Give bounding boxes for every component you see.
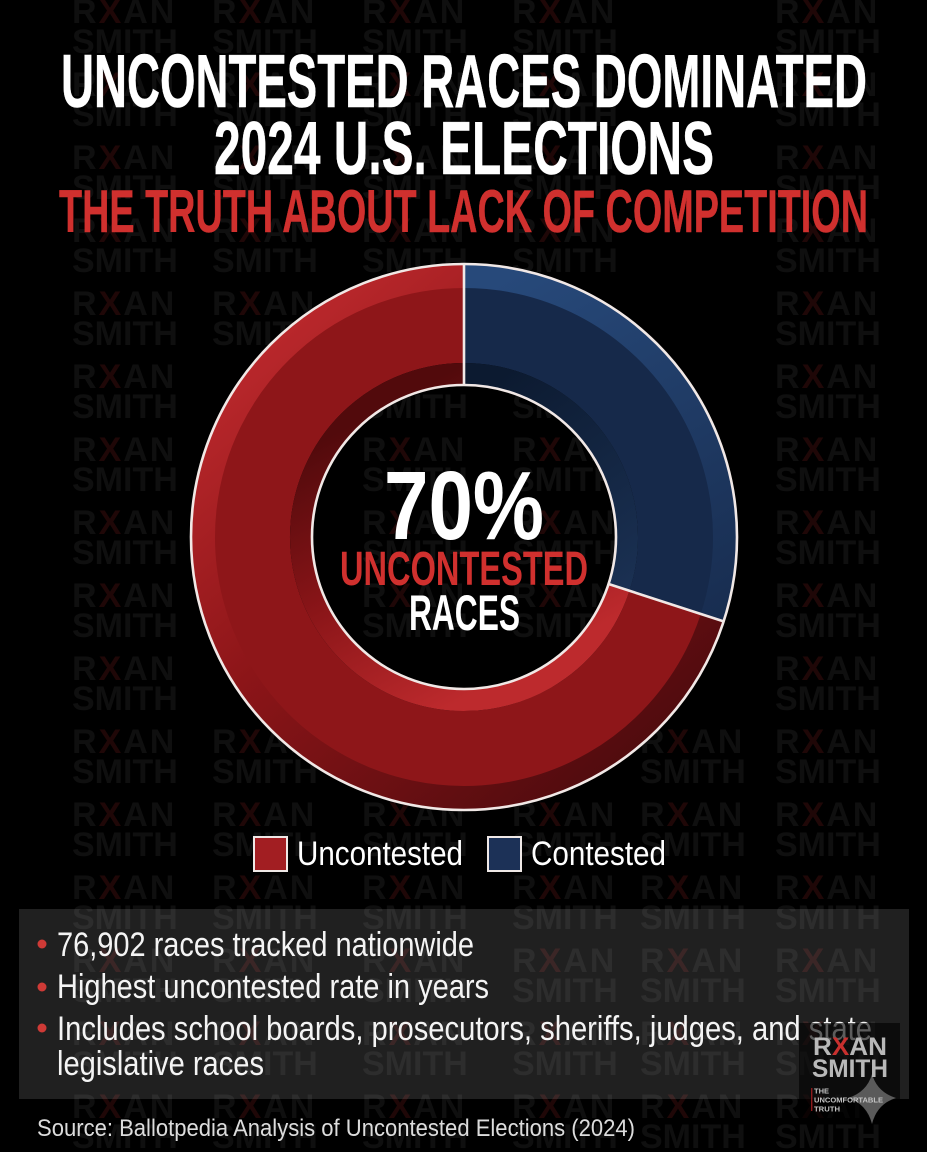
- bullet 2: Highest uncontested rate in years: [57, 968, 489, 1006]
- watermark pattern: SMITH: [212, 23, 318, 61]
- watermark pattern: RXAN: [512, 796, 616, 834]
- legend: [254, 835, 666, 873]
- watermark pattern: RXAN: [72, 650, 176, 688]
- watermark pattern: SMITH: [72, 169, 178, 207]
- watermark pattern: RXAN: [775, 358, 879, 396]
- watermark pattern: RXAN: [362, 212, 466, 250]
- watermark pattern: SMITH: [72, 388, 178, 426]
- watermark pattern: RXAN: [775, 1015, 879, 1053]
- watermark pattern: RXAN: [212, 723, 316, 761]
- watermark pattern: SMITH: [775, 242, 881, 280]
- watermark pattern: SMITH: [72, 23, 178, 61]
- donut chart: [191, 264, 737, 810]
- watermark pattern: SMITH: [512, 23, 618, 61]
- uncontested label: UNCONTESTED: [340, 543, 588, 596]
- watermark pattern: RXAN: [640, 1015, 744, 1053]
- legend label: contested: Contested: [531, 835, 666, 873]
- watermark pattern: SMITH: [72, 96, 178, 134]
- bullet 3: [38, 1010, 872, 1083]
- watermark pattern: SMITH: [775, 315, 881, 353]
- watermark pattern: RXAN: [72, 212, 176, 250]
- watermark pattern: RXAN: [362, 796, 466, 834]
- watermark pattern: RXAN: [72, 1088, 176, 1126]
- logo name: RXAN: [813, 1033, 887, 1061]
- bullet 3: legislative races: [57, 1045, 264, 1083]
- watermark pattern: SMITH: [512, 461, 618, 499]
- watermark pattern: SMITH: [512, 534, 618, 572]
- watermark pattern: RXAN: [72, 504, 176, 542]
- watermark pattern: SMITH: [212, 826, 318, 864]
- watermark pattern: SMITH: [72, 242, 178, 280]
- watermark pattern: RXAN: [775, 942, 879, 980]
- watermark pattern: RXAN: [512, 1088, 616, 1126]
- logo backdrop: [799, 1023, 900, 1123]
- watermark pattern: SMITH: [362, 461, 468, 499]
- watermark pattern: SMITH: [362, 607, 468, 645]
- watermark pattern: RXAN: [775, 431, 879, 469]
- watermark pattern: SMITH: [775, 607, 881, 645]
- watermark pattern: SMITH: [775, 899, 881, 937]
- bullet 1: 76,902 races tracked nationwide: [57, 926, 474, 964]
- watermark pattern: RXAN: [212, 796, 316, 834]
- logo tagline: [814, 1088, 883, 1114]
- watermark pattern: SMITH: [212, 753, 318, 791]
- legend label: uncontested: Uncontested: [297, 835, 463, 873]
- panel background: [19, 909, 909, 1099]
- watermark pattern: RXAN: [72, 942, 176, 980]
- watermark pattern: RXAN: [212, 1088, 316, 1126]
- watermark pattern: RXAN: [512, 869, 616, 907]
- watermark pattern: SMITH: [640, 899, 746, 937]
- watermark pattern: SMITH: [362, 826, 468, 864]
- watermark pattern: SMITH: [362, 96, 468, 134]
- logo tagline: THE: [814, 1088, 829, 1096]
- watermark pattern: RXAN: [512, 66, 616, 104]
- watermark pattern: SMITH: [362, 972, 468, 1010]
- watermark pattern: RXAN: [512, 139, 616, 177]
- watermark pattern: RXAN: [362, 577, 466, 615]
- segment: uncontested 70%: [203, 276, 712, 798]
- watermark pattern: SMITH: [72, 899, 178, 937]
- watermark pattern: SMITH: [512, 242, 618, 280]
- watermark pattern: RXAN: [775, 869, 879, 907]
- watermark pattern: SMITH: [212, 972, 318, 1010]
- watermark pattern: SMITH: [212, 1045, 318, 1083]
- watermark pattern: SMITH: [512, 1045, 618, 1083]
- watermark pattern: RXAN: [775, 212, 879, 250]
- watermark pattern: SMITH: [72, 1045, 178, 1083]
- watermark pattern: SMITH: [362, 242, 468, 280]
- watermark pattern: SMITH: [512, 169, 618, 207]
- watermark pattern: RXAN: [775, 650, 879, 688]
- watermark pattern: RXAN: [72, 285, 176, 323]
- logo tagline: TRUTH: [814, 1106, 840, 1114]
- 70 percent: 70%: [384, 451, 544, 560]
- logo: Ryan Smith watermark badge: SMITH: [812, 1055, 888, 1083]
- watermark pattern: RXAN: [212, 942, 316, 980]
- watermark pattern: SMITH: [775, 23, 881, 61]
- watermark pattern: SMITH: [212, 169, 318, 207]
- watermark pattern: SMITH: [512, 826, 618, 864]
- watermark pattern: RXAN: [72, 796, 176, 834]
- watermark pattern: SMITH: [775, 972, 881, 1010]
- watermark pattern: RXAN: [775, 504, 879, 542]
- source note: Source: Ballotpedia Analysis of Uncontested Elections (2024): [37, 1115, 635, 1142]
- watermark pattern: RXAN: [640, 942, 744, 980]
- watermark pattern: RXAN: [362, 431, 466, 469]
- watermark pattern: SMITH: [362, 899, 468, 937]
- center label: [340, 451, 588, 641]
- watermark pattern: RXAN: [362, 139, 466, 177]
- watermark pattern: RXAN: [512, 431, 616, 469]
- watermark pattern: SMITH: [640, 826, 746, 864]
- watermark pattern: SMITH: [212, 899, 318, 937]
- watermark pattern: RXAN: [362, 66, 466, 104]
- legend swatch: uncontested: [254, 837, 287, 871]
- watermark pattern: SMITH: [212, 315, 318, 353]
- watermark pattern: SMITH: [512, 899, 618, 937]
- watermark pattern: SMITH: [775, 96, 881, 134]
- legend swatch: contested: [488, 837, 521, 871]
- watermark pattern: RXAN: [775, 796, 879, 834]
- watermark pattern: SMITH: [775, 826, 881, 864]
- watermark pattern: RXAN: [512, 1015, 616, 1053]
- watermark pattern: SMITH: [72, 972, 178, 1010]
- watermark pattern: RXAN: [775, 577, 879, 615]
- watermark pattern: SMITH: [72, 534, 178, 572]
- watermark pattern: SMITH: [775, 169, 881, 207]
- watermark pattern: SMITH: [72, 680, 178, 718]
- watermark pattern: SMITH: [512, 96, 618, 134]
- watermark pattern: RXAN: [640, 796, 744, 834]
- watermark pattern: SMITH: [362, 388, 468, 426]
- watermark pattern: SMITH: [775, 1045, 881, 1083]
- watermark pattern: RXAN: [212, 1015, 316, 1053]
- watermark pattern: SMITH: [362, 169, 468, 207]
- watermark pattern: RXAN: [775, 139, 879, 177]
- watermark pattern: SMITH: [512, 972, 618, 1010]
- watermark pattern: RXAN: [512, 212, 616, 250]
- watermark pattern: RXAN: [72, 139, 176, 177]
- watermark pattern: RXAN: [212, 66, 316, 104]
- watermark pattern: RXAN: [362, 1015, 466, 1053]
- watermark pattern: RXAN: [72, 66, 176, 104]
- watermark pattern: RXAN: [775, 723, 879, 761]
- watermark pattern: SMITH: [775, 534, 881, 572]
- watermark pattern: RXAN: [72, 358, 176, 396]
- watermark pattern: RXAN: [362, 869, 466, 907]
- watermark pattern: RXAN: [72, 431, 176, 469]
- watermark pattern: SMITH: [775, 388, 881, 426]
- watermark pattern: SMITH: [640, 1045, 746, 1083]
- logo: Ryan Smith watermark badge: [799, 1023, 900, 1124]
- watermark pattern: RXAN: [362, 504, 466, 542]
- watermark pattern: SMITH: [362, 1045, 468, 1083]
- watermark pattern: RXAN: [362, 942, 466, 980]
- watermark pattern: SMITH: [72, 461, 178, 499]
- watermark pattern: SMITH: [72, 753, 178, 791]
- watermark pattern: RXAN: [72, 723, 176, 761]
- watermark pattern: RXAN: [512, 504, 616, 542]
- watermark pattern: RXAN: [72, 1015, 176, 1053]
- watermark pattern: RXAN: [640, 1088, 744, 1126]
- watermark pattern: SMITH: [72, 826, 178, 864]
- watermark pattern: RXAN: [775, 285, 879, 323]
- watermark pattern: RXAN: [512, 577, 616, 615]
- watermark pattern: RXAN: [640, 869, 744, 907]
- watermark pattern: SMITH: [775, 753, 881, 791]
- watermark pattern: SMITH: [212, 96, 318, 134]
- watermark pattern: RXAN: [72, 869, 176, 907]
- watermark pattern: RXAN: [212, 139, 316, 177]
- watermark pattern: SMITH: [362, 534, 468, 572]
- logo star: [848, 1074, 896, 1124]
- watermark pattern: RXAN: [72, 577, 176, 615]
- watermark pattern: SMITH: [362, 23, 468, 61]
- watermark pattern: RXAN: [212, 285, 316, 323]
- watermark pattern: SMITH: [512, 388, 618, 426]
- watermark pattern: RXAN: [640, 723, 744, 761]
- watermark pattern: SMITH: [512, 607, 618, 645]
- logo tagline: UNCOMFORTABLE: [814, 1098, 883, 1104]
- watermark pattern: SMITH: [775, 680, 881, 718]
- title: [59, 39, 868, 245]
- segment: contested 30%: [464, 276, 725, 618]
- watermark pattern: RXAN: [212, 212, 316, 250]
- logo tagline rule: [811, 1088, 812, 1111]
- watermark pattern: SMITH: [640, 972, 746, 1010]
- watermark pattern: RXAN: [512, 942, 616, 980]
- white ring outlines: [191, 264, 737, 810]
- watermark pattern: RXAN: [362, 1088, 466, 1126]
- watermark pattern: SMITH: [212, 242, 318, 280]
- watermark pattern: SMITH: [72, 607, 178, 645]
- watermark pattern: RXAN: [775, 66, 879, 104]
- watermark pattern: RXAN: [775, 1088, 879, 1126]
- watermark pattern: SMITH: [72, 315, 178, 353]
- watermark pattern: SMITH: [775, 461, 881, 499]
- panel: key facts: [19, 909, 909, 1099]
- watermark pattern: RXAN: [212, 869, 316, 907]
- watermark pattern: SMITH: [640, 753, 746, 791]
- races label: RACES: [409, 585, 520, 641]
